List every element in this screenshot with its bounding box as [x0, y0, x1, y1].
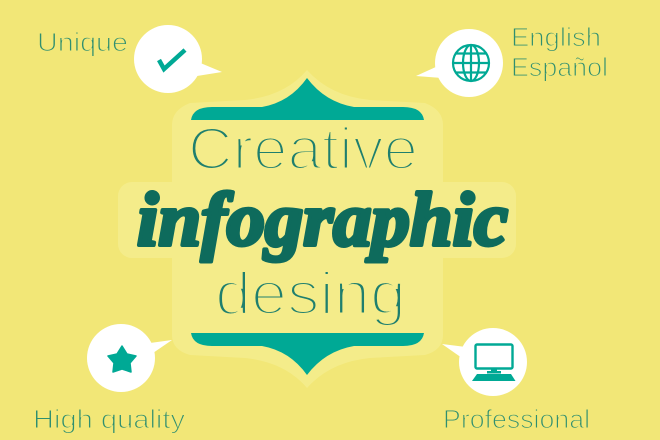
label: High quality: High quality — [33, 404, 185, 434]
callout: Professional — [442, 328, 590, 434]
label: Español: Español — [511, 52, 608, 82]
icon: check mark — [159, 50, 185, 69]
label: English: English — [511, 22, 601, 52]
bottom teal ornament — [191, 333, 424, 375]
speech bubble: Unique — [134, 25, 222, 93]
icon: star — [108, 346, 136, 372]
central light badge panel — [118, 70, 516, 388]
title: infographic: infographic — [137, 178, 508, 262]
callout: Unique — [37, 25, 222, 93]
icon: globe — [453, 45, 489, 81]
callout: High quality — [33, 324, 185, 434]
icon: computer — [472, 344, 516, 381]
speech bubble: languages — [416, 29, 503, 97]
speech bubble: High quality — [87, 324, 172, 392]
speech bubble: Professional — [442, 328, 527, 396]
top teal ornament — [191, 78, 424, 120]
label: Unique: Unique — [37, 27, 128, 57]
title: desing: desing — [215, 260, 406, 327]
label: Professional: Professional — [443, 404, 590, 434]
callout: languages — [416, 22, 608, 97]
title: Creative: Creative — [188, 116, 418, 182]
